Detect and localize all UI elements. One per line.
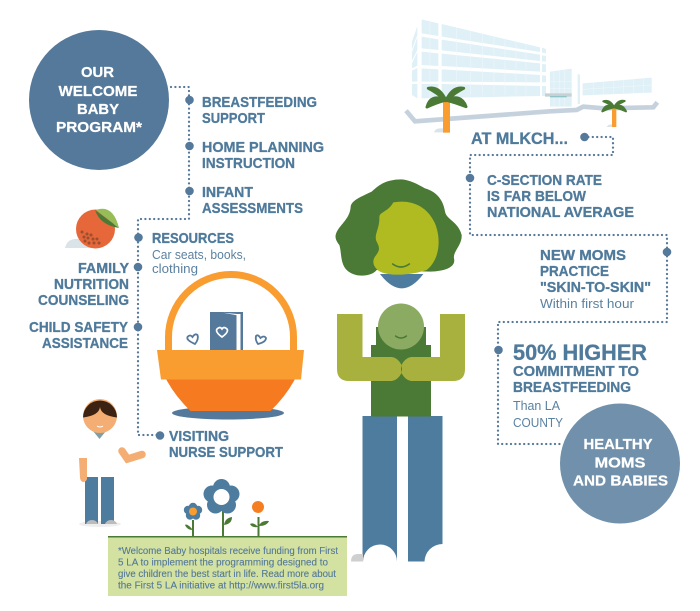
heading circle: our welcome baby program: OUR	[81, 64, 114, 81]
stat: 50% higher commitment to breastfeeding: COUNTY	[513, 415, 563, 430]
program item: breastfeeding support: BREASTFEEDING	[202, 95, 317, 111]
program item: resources: Car seats, books,	[152, 247, 246, 262]
mother's head and hair	[336, 179, 462, 288]
stat: c-section rate: C-SECTION RATE	[487, 173, 602, 189]
icon: flowers	[184, 479, 269, 536]
stat: 50% higher commitment to breastfeeding	[494, 340, 647, 430]
stat: c-section rate: IS FAR BELOW	[487, 189, 586, 205]
mother's arms	[337, 314, 465, 381]
program item: infant assessments: ASSESSMENTS	[202, 201, 303, 217]
program item: family nutrition counseling: NUTRITION	[54, 277, 129, 293]
program item: visiting nurse support: VISITING	[169, 429, 229, 445]
baby's head	[378, 304, 424, 350]
program item: breastfeeding support: SUPPORT	[202, 111, 265, 127]
mother's torso	[371, 327, 431, 416]
stat: 50% higher commitment to breastfeeding: Than LA	[513, 398, 560, 413]
program item: home planning instruction: HOME PLANNING	[202, 140, 324, 156]
stat: 50% higher commitment to breastfeeding: BREASTFEEDING	[513, 380, 631, 396]
stat: 50% higher commitment to breastfeeding: COMMITMENT TO	[513, 364, 639, 380]
footnote panel: *Welcome Baby hospitals receive funding from First	[118, 546, 338, 557]
stat: skin-to-skin: "SKIN-TO-SKIN"	[540, 280, 651, 296]
icon: basket with book and hearts	[157, 274, 304, 420]
stat: skin-to-skin: PRACTICE	[540, 264, 609, 280]
program item: infant assessments: INFANT	[202, 185, 253, 201]
stat: skin-to-skin	[540, 248, 671, 311]
program item: visiting nurse support	[156, 429, 283, 461]
mother's legs	[351, 416, 442, 562]
program item: resources	[134, 231, 246, 276]
stat: skin-to-skin: Within first hour	[540, 296, 635, 311]
outcome circle: healthy moms and babies: HEALTHY	[584, 436, 652, 453]
program item: family nutrition counseling: FAMILY	[78, 261, 129, 277]
illustration: mother holding baby	[336, 179, 465, 561]
heading circle: our welcome baby program	[29, 30, 169, 170]
outcome circle: healthy moms and babies: MOMS	[594, 454, 646, 472]
stat: c-section rate: NATIONAL AVERAGE	[487, 205, 634, 221]
program item: home planning instruction	[185, 140, 324, 172]
heading circle: our welcome baby program: BABY	[77, 101, 119, 118]
program item: home planning instruction: INSTRUCTION	[202, 156, 295, 172]
program item: visiting nurse support: NURSE SUPPORT	[169, 445, 283, 461]
footnote panel: the First 5 LA initiative at http://www.first5la.org	[118, 580, 324, 592]
program item: family nutrition counseling	[38, 261, 142, 309]
footnote panel: give children the best start in life. Read more about	[118, 569, 336, 580]
stat: c-section rate	[466, 173, 634, 221]
heading circle: our welcome baby program: WELCOME	[58, 83, 138, 100]
outcome circle: healthy moms and babies: AND BABIES	[573, 472, 668, 490]
icon: orange fruit	[65, 209, 119, 248]
program item: resources: RESOURCES	[152, 231, 234, 247]
program item: child safety assistance	[29, 320, 142, 352]
stat: 50% higher commitment to breastfeeding: 50% HIGHER	[513, 340, 647, 365]
footnote panel	[108, 536, 347, 596]
outcome circle: healthy moms and babies	[560, 404, 680, 524]
program item: breastfeeding support	[185, 95, 317, 127]
heading: at MLKCH: AT MLKCH...	[471, 129, 568, 148]
program item: infant assessments	[185, 185, 303, 217]
program item: child safety assistance: ASSISTANCE	[42, 336, 128, 352]
program item: resources: clothing	[152, 261, 198, 276]
footnote panel: 5 LA to implement the programming designed to	[118, 558, 328, 568]
stat: skin-to-skin: NEW MOMS	[540, 248, 626, 264]
heading circle: our welcome baby program: PROGRAM*	[56, 119, 142, 136]
program item: child safety assistance: CHILD SAFETY	[29, 320, 128, 336]
icon: hospital building with palm trees	[406, 19, 657, 133]
program item: family nutrition counseling: COUNSELING	[38, 293, 129, 309]
icon: child figure	[79, 399, 142, 527]
